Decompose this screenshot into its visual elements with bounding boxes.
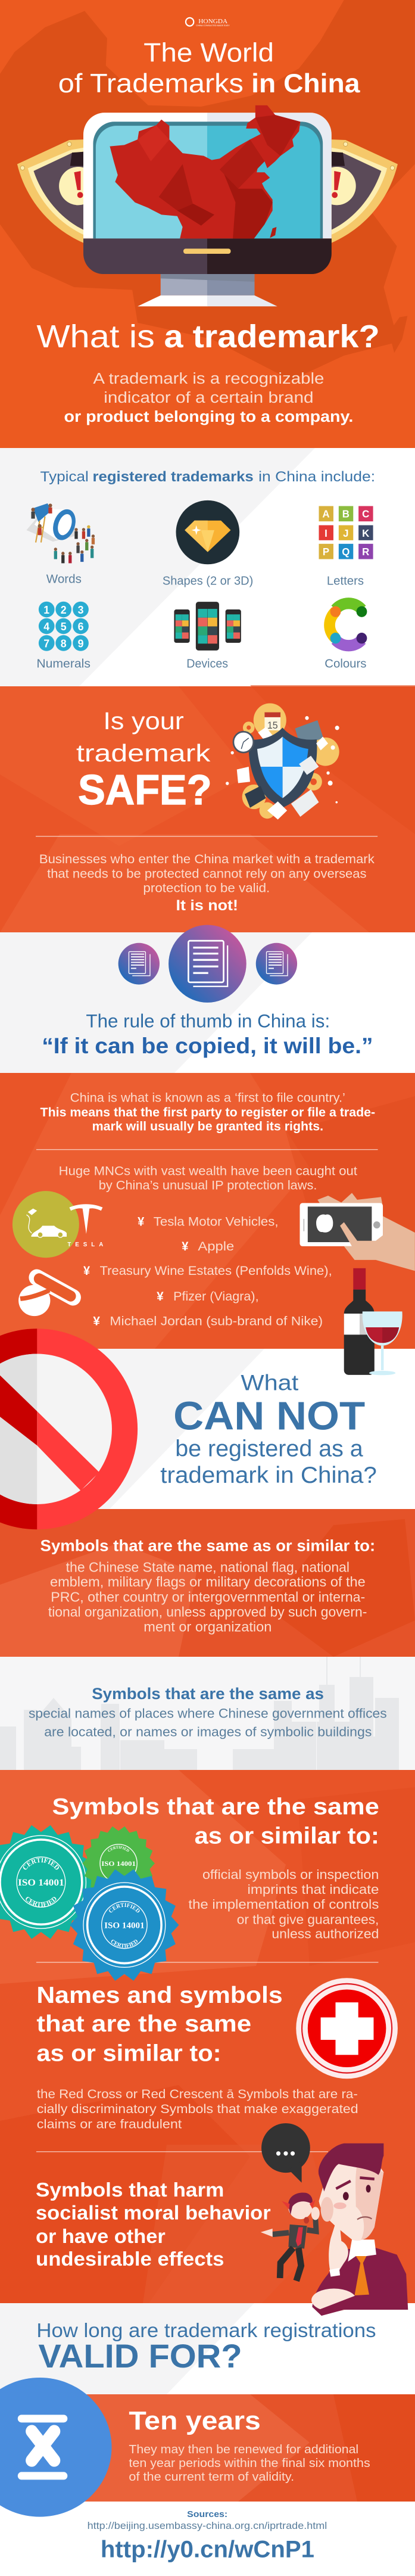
icon: letter blocks: A — [322, 508, 330, 520]
heading: is your trademark safe: trademark — [76, 740, 210, 767]
list: Pfizer: ¥ — [157, 1290, 164, 1303]
icon: letter blocks — [319, 506, 373, 559]
list: Pfizer: Pfizer (Viagra), — [173, 1290, 259, 1303]
icon: mobile devices — [174, 602, 241, 651]
icon: teal ISO seal — [0, 1825, 92, 1939]
text: red cross: cially discriminatory Symbols that make exaggerated — [37, 2102, 358, 2116]
divider — [36, 1962, 378, 1963]
icon: diamond — [176, 500, 239, 564]
text: moral behavior: socialist moral behavior — [36, 2201, 271, 2224]
icon: letter blocks: R — [362, 546, 370, 558]
text: huge MNCs: by China’s unusual IP protection laws. — [99, 1178, 317, 1193]
text: state symbols: ment or organization — [143, 1619, 272, 1635]
section: typical registered trademarks — [26, 469, 377, 837]
label: letters: Letters — [327, 574, 364, 588]
divider — [36, 836, 377, 837]
text: overseas protection: Businesses who enter the China market with a trademark — [39, 853, 375, 866]
logo: HONGDA — [198, 18, 228, 25]
list: Michael Jordan: Michael Jordan (sub-brand of Nike) — [110, 1314, 323, 1328]
heading: what is a trademark — [36, 319, 380, 354]
list: Apple: ¥ — [182, 1240, 189, 1253]
label: words: Words — [46, 573, 82, 586]
text: trademark definition: A trademark is a recognizable — [93, 371, 324, 387]
icon: left warning shield — [17, 139, 97, 243]
text: overseas protection: It is not! — [176, 898, 238, 914]
divider — [36, 2151, 328, 2152]
heading: typical trademarks: Typical — [40, 469, 89, 484]
title: of Trademarks — [58, 69, 244, 98]
text: ten years: Ten years — [129, 2406, 261, 2435]
icon: Tesla electric car — [13, 1191, 103, 1258]
text: trademark definition: or product belonging to a company. — [64, 409, 353, 425]
text: trademark definition — [64, 371, 353, 425]
text: state symbols: tional organization, unless approved by such govern- — [48, 1604, 367, 1620]
heading: what can not be registered: CAN NOT — [173, 1394, 365, 1438]
text: places and buildings: special names of places where Chinese government offices — [29, 1706, 387, 1721]
icon: teal ISO seal: CERTIFIED — [23, 1858, 59, 1869]
heading: is your trademark safe: Is your — [103, 708, 184, 735]
text: ten years: They may then be renewed for additional — [129, 2443, 358, 2456]
icon: numerals grid: 6 — [78, 621, 83, 633]
list: Treasury Wine Estates: ¥ — [83, 1264, 91, 1278]
icon: letter blocks: Q — [342, 546, 350, 558]
text: sources — [88, 2510, 327, 2531]
icon: numerals grid: 5 — [61, 621, 67, 633]
text: official symbols — [188, 1867, 379, 1942]
icon: letter blocks: C — [362, 508, 369, 520]
heading: symbols same or similar — [52, 1794, 379, 1849]
divider — [36, 1149, 378, 1150]
text: rule of thumb: The rule of thumb in China is: — [86, 1010, 330, 1032]
heading: typical trademarks: registered trademarks — [93, 469, 254, 484]
icon: letter blocks: I — [324, 527, 327, 539]
text: official symbols: the implementation of controls — [188, 1897, 379, 1912]
text: rule of thumb: “If it can be copied, it will be.” — [42, 1034, 373, 1058]
heading: how long valid — [36, 2319, 376, 2375]
icon: wine bottle and glass — [344, 1268, 402, 1375]
list: Tesla: Tesla Motor Vehicles, — [154, 1215, 279, 1229]
text: sources: Sources: — [187, 2510, 227, 2519]
heading: typical trademarks: in China include: — [258, 469, 375, 484]
icon: right warning shield — [318, 139, 398, 243]
text: places and buildings: are located, or names or images of symbolic buildings — [44, 1724, 372, 1740]
heading: names and symbols: that are the same — [36, 2012, 251, 2037]
icon: prohibition sign — [0, 1329, 138, 1529]
icon: letter blocks: P — [323, 546, 329, 558]
text: short link: http://y0.cn/wCnP1 — [101, 2537, 314, 2563]
icon: document circles — [118, 925, 297, 1003]
icon: blue ISO seal: CERTIFIED — [111, 1940, 138, 1948]
title: The World — [143, 38, 274, 67]
heading: names and symbols: as or similar to: — [36, 2041, 221, 2067]
text: official symbols: unless authorized — [272, 1926, 379, 1942]
text: ten years: ten year periods within the final six months — [129, 2457, 370, 2470]
icon: pills — [18, 1267, 84, 1316]
section: header — [0, 0, 415, 425]
map of China — [110, 105, 300, 238]
text: red cross: claims or are fraudulent — [37, 2117, 182, 2131]
text: first to file: China is what is known as a ‘first to file country.’ — [70, 1091, 345, 1105]
icon: letter blocks: J — [343, 527, 349, 539]
text: huge MNCs: Huge MNCs with vast wealth have been caught out — [59, 1164, 357, 1178]
text: state symbols: emblem, military flags or military decorations of the — [50, 1575, 366, 1589]
icon: megaphone with crowd — [26, 503, 95, 563]
list: Apple — [182, 1240, 234, 1253]
icon: blue ISO seal: CERTIFIED — [109, 1903, 140, 1912]
text: state symbols: the Chinese State name, national flag, national — [66, 1560, 350, 1575]
text: moral behavior: Symbols that harm — [36, 2178, 224, 2201]
icon: green ISO seal: ISO 14001 — [101, 1860, 136, 1868]
icon: green ISO seal: CERTIFIED — [108, 1846, 129, 1852]
text: moral behavior — [36, 2178, 271, 2270]
heading: what can not be registered — [160, 1370, 377, 1488]
heading: is your trademark safe: SAFE? — [78, 766, 212, 813]
icon: teal ISO seal: CERTIFIED — [26, 1897, 57, 1906]
text: state symbols — [40, 1536, 375, 1635]
icon: letter blocks: B — [342, 508, 350, 520]
text: huge MNCs — [59, 1164, 357, 1193]
text: state symbols: PRC, other country or intergovernmental or interna- — [51, 1589, 365, 1605]
logo — [186, 18, 230, 27]
icon: blue ISO seal: ISO 14001 — [104, 1921, 145, 1930]
list: Apple: Apple — [198, 1240, 234, 1253]
heading: how long valid: VALID FOR? — [38, 2338, 242, 2375]
list: Treasury Wine Estates: Treasury Wine Estates (Penfolds Wine), — [100, 1264, 332, 1278]
icon: desktop monitor — [83, 113, 332, 306]
icon: speech bubble — [261, 2123, 310, 2183]
text: sources: http://beijing.usembassy-china.org.cn/iprtrade.html — [88, 2521, 327, 2531]
icon: green ISO seal — [82, 1827, 155, 1887]
heading: what can not be registered: trademark in China? — [160, 1463, 377, 1488]
label: shapes: Shapes (2 or 3D) — [163, 574, 253, 588]
heading: what can not be registered: be registered as a — [175, 1436, 364, 1462]
logo: CHINA CONSULTED MADE EASY — [196, 24, 230, 27]
heading: symbols same or similar: Symbols that are the same — [52, 1794, 379, 1819]
text: overseas protection — [39, 853, 375, 914]
heading: symbols same or similar: as or similar to: — [195, 1824, 379, 1849]
icon: numerals grid: 8 — [61, 637, 67, 649]
icon: small devil man — [261, 2192, 320, 2281]
text: trademark definition: indicator of a certain brand — [104, 389, 314, 406]
text: official symbols: official symbols or inspection — [202, 1867, 379, 1882]
list: Michael Jordan: ¥ — [93, 1314, 100, 1328]
icon: numerals grid: 4 — [43, 621, 49, 633]
text: overseas protection: that needs to be protected cannot rely on any overseas — [47, 867, 366, 881]
text: official symbols: or that give guarantees, — [237, 1912, 379, 1927]
icon: numerals grid — [39, 602, 89, 651]
icon: numerals grid: 2 — [61, 604, 67, 616]
text: overseas protection: protection to be valid. — [143, 881, 270, 895]
heading: names and symbols — [36, 1983, 283, 2067]
icon: hand holding phone — [300, 1193, 415, 1271]
list: Tesla: ¥ — [138, 1215, 145, 1229]
text: state symbols: Symbols that are the same as or similar to: — [40, 1536, 375, 1555]
text: moral behavior: undesirable effects — [36, 2248, 224, 2270]
text: rule of thumb — [42, 1010, 373, 1058]
icon: colours ring — [330, 603, 367, 646]
icon: letter blocks: K — [362, 527, 370, 539]
text: first to file — [40, 1091, 375, 1134]
text: red cross: the Red Cross or Red Crescent ā Symbols that are ra- — [37, 2087, 358, 2101]
icon: numerals grid: 3 — [78, 604, 83, 616]
heading: what is a trademark: What is — [36, 319, 155, 354]
icon: worried man — [311, 2143, 408, 2316]
icon: numerals grid: 7 — [43, 637, 49, 649]
text: red cross — [37, 2087, 358, 2131]
icon: numerals grid: 1 — [43, 604, 49, 616]
background China map silhouette — [0, 0, 415, 380]
icon: security shield with office items — [226, 703, 339, 820]
text: first to file: This means that the first party to register or file a trade- — [40, 1106, 375, 1119]
icon: teal ISO seal: ISO 14001 — [18, 1878, 64, 1888]
icon: roman numeral ten — [0, 2378, 112, 2517]
heading: symbols same as places: Symbols that are the same as — [92, 1684, 324, 1703]
heading: what is a trademark: a trademark? — [164, 319, 380, 354]
icon: Tesla electric car: TESLA — [67, 1242, 103, 1248]
icon: blue ISO seal — [70, 1869, 179, 1981]
icon: security shield with office items: 15 — [267, 720, 278, 731]
text: ten years — [129, 2406, 370, 2484]
heading: what can not be registered: What — [241, 1370, 298, 1395]
icon: numerals grid: 9 — [78, 637, 83, 649]
label: devices: Devices — [186, 657, 228, 670]
heading: how long valid: How long are trademark registrations — [36, 2319, 376, 2341]
title: in China — [251, 69, 360, 98]
section: place names and official symbols — [0, 1706, 398, 2131]
text: places and buildings — [29, 1706, 387, 1740]
title — [58, 38, 360, 98]
heading: typical trademarks — [40, 469, 375, 484]
icon: red cross — [296, 1978, 398, 2079]
label: numerals: Numerals — [36, 657, 91, 670]
text: official symbols: imprints that indicate — [248, 1882, 379, 1897]
heading: names and symbols: Names and symbols — [36, 1983, 283, 2008]
section: cannot be registered — [0, 1267, 402, 1703]
section: moral behavior and validity — [0, 2123, 408, 2563]
text: ten years: of the current term of validity. — [129, 2471, 294, 2484]
label: colours: Colours — [324, 657, 366, 670]
text: first to file: mark will usually be granted its rights. — [92, 1119, 323, 1134]
heading: is your trademark safe — [76, 708, 212, 813]
section: is your trademark safe text and rule of thumb — [13, 853, 415, 1278]
text: moral behavior: or have other — [36, 2225, 166, 2247]
